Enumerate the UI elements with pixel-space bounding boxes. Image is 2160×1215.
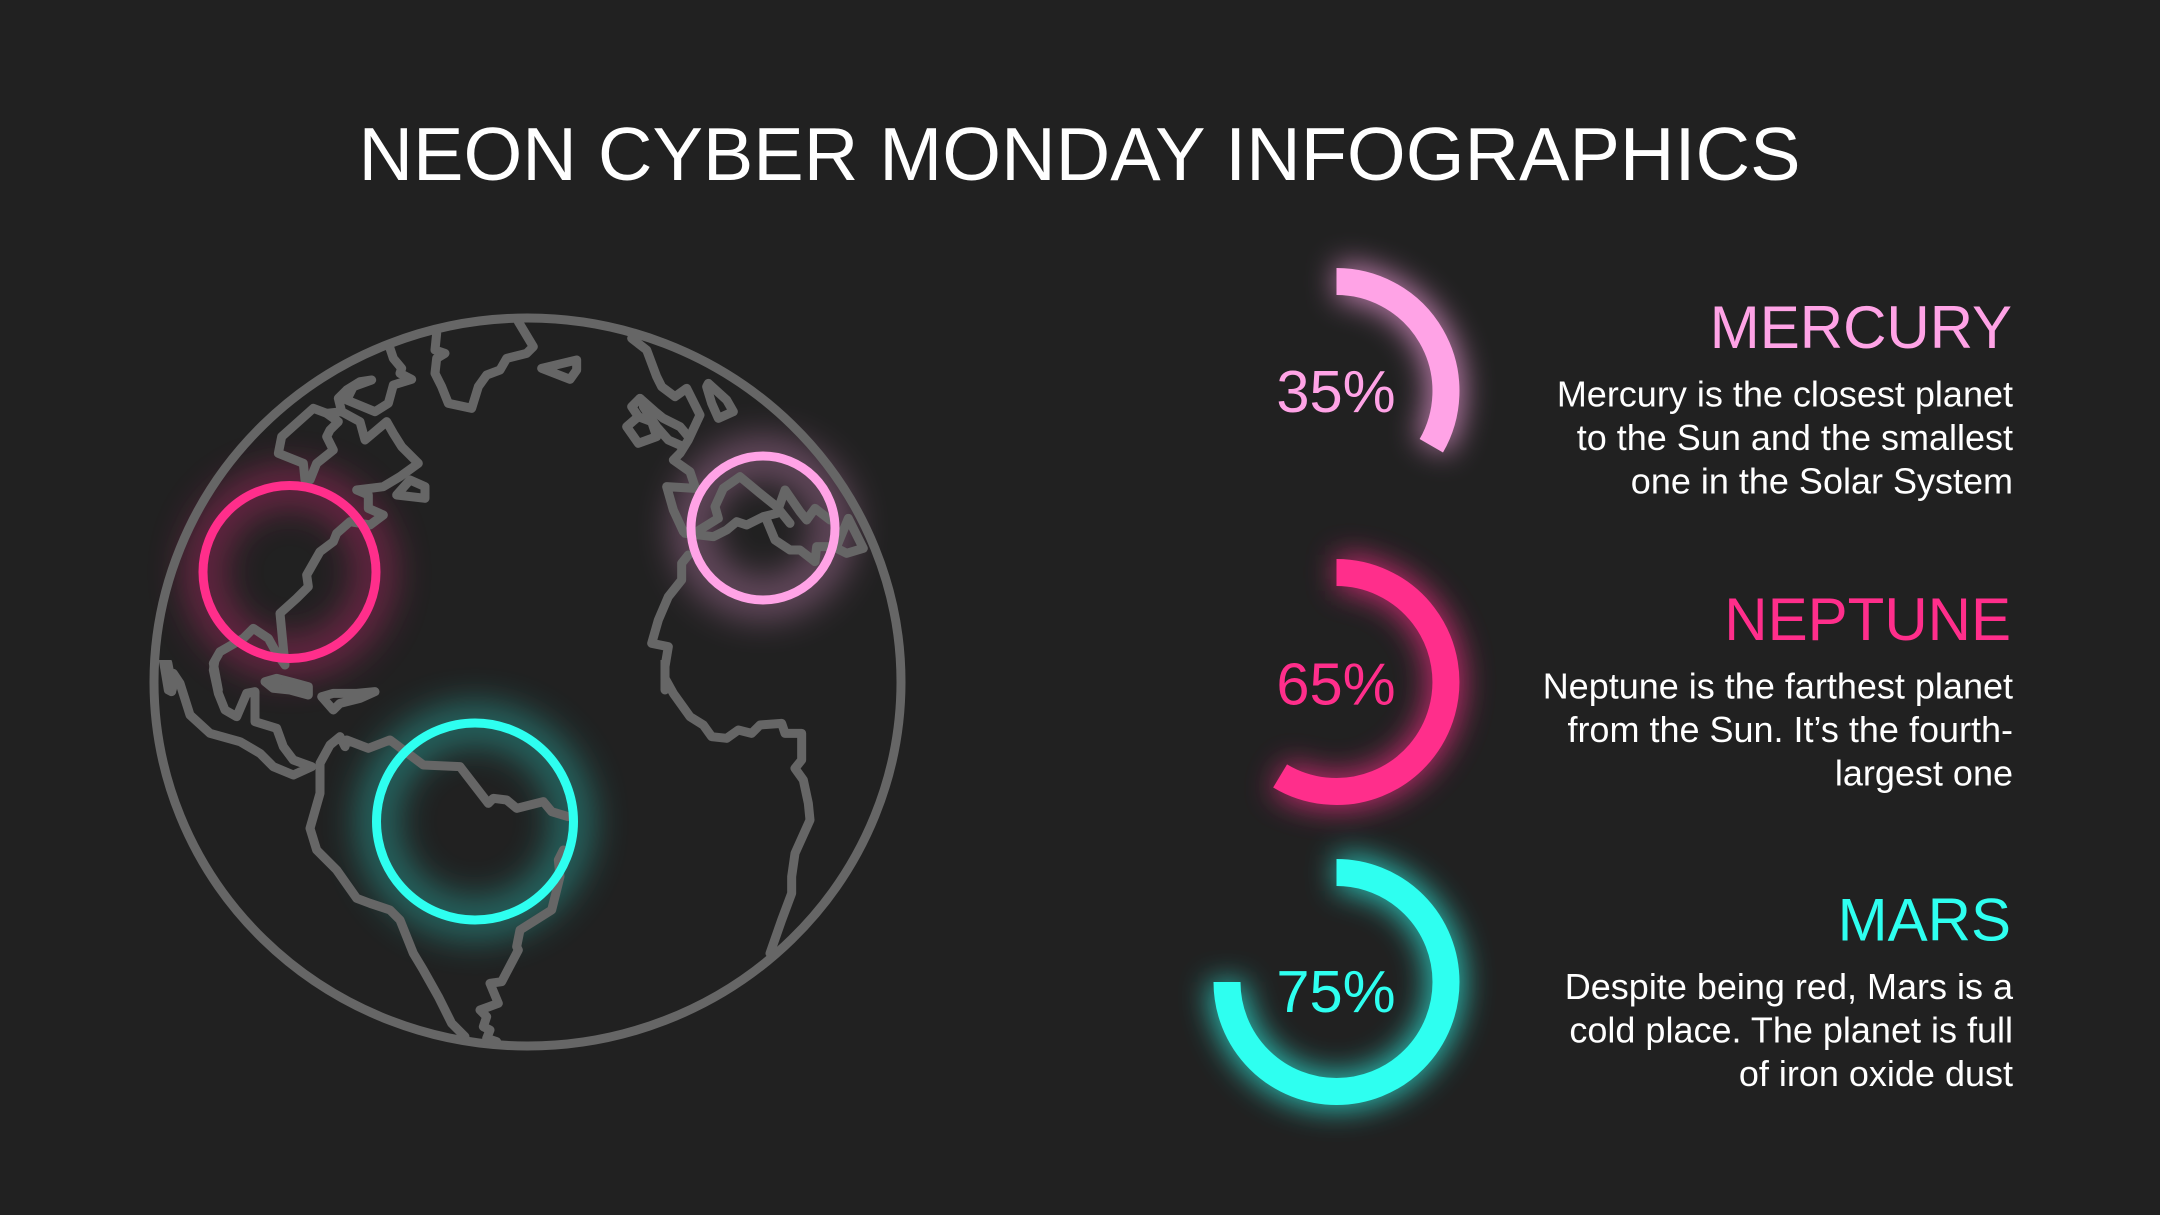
location ring: mars <box>376 723 574 920</box>
europe and north africa outlines <box>627 338 863 690</box>
panel: mercury <box>1276 282 2013 501</box>
title: NEON CYBER MONDAY INFOGRAPHICS <box>358 113 1801 197</box>
text block: neptune: Neptune is the farthest planet <box>1543 666 2013 707</box>
text block: neptune <box>1543 666 2013 793</box>
text block: mars <box>1565 966 2014 1094</box>
north america and greenland outlines <box>213 322 577 690</box>
location ring: neptune <box>203 486 376 658</box>
text block: mars: cold place. The planet is full <box>1569 1010 2013 1050</box>
africa outline <box>665 660 810 953</box>
percentage: mercury: 35% <box>1276 358 1396 425</box>
text block: mercury <box>1557 374 2013 501</box>
glow: location rings <box>203 456 835 920</box>
text block: mercury: one in the Solar System <box>1631 460 2013 501</box>
percentage: neptune: 65% <box>1276 650 1396 718</box>
central america and south america outlines <box>163 660 568 1042</box>
globe outline <box>154 318 901 1046</box>
heading: mercury: MERCURY <box>1710 294 2012 361</box>
text block: neptune: largest one <box>1835 752 2013 793</box>
donut chart: mars 75% <box>1227 872 1446 1091</box>
panel: mars <box>1227 872 2014 1094</box>
percentage: mars: 75% <box>1276 958 1396 1025</box>
text block: neptune: from the Sun. It’s the fourth- <box>1567 709 2013 750</box>
text block: mars: of iron oxide dust <box>1739 1053 2013 1094</box>
donut chart: neptune 65% <box>1280 572 1446 792</box>
panel: neptune <box>1276 572 2013 793</box>
donut chart: mercury 35% <box>1336 282 1446 446</box>
location ring: mercury <box>691 456 835 600</box>
text block: mercury: Mercury is the closest planet <box>1557 374 2013 415</box>
text block: mars: Despite being red, Mars is a <box>1565 966 2014 1007</box>
text block: mercury: to the Sun and the smallest <box>1577 417 2013 458</box>
heading: neptune: NEPTUNE <box>1724 586 2011 653</box>
panel: globe map <box>154 318 901 1046</box>
heading: mars: MARS <box>1838 886 2011 953</box>
